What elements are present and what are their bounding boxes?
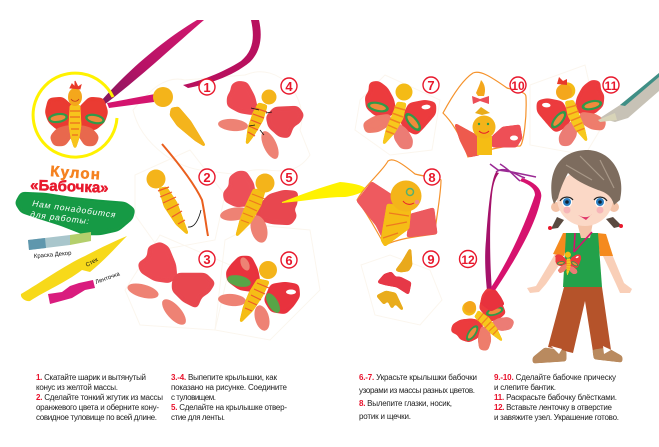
step 10: 10	[511, 79, 525, 93]
instructions column 3: узорами из массы разных цветов.	[359, 386, 475, 395]
label: ribbon: Ленточка	[95, 271, 121, 286]
instructions column 1: оранжевого цвета и оберните кону-	[36, 403, 159, 412]
sleeves	[553, 233, 570, 256]
icon: modelling knife: Стек	[85, 257, 100, 269]
instructions column 2	[171, 373, 288, 422]
icon: ribbon piece	[48, 280, 95, 304]
step 11: 11	[605, 79, 618, 93]
arms	[527, 254, 564, 293]
main pendant circle	[33, 73, 117, 157]
instructions column 4: 9.-10. Сделайте бабочке прическу	[494, 373, 616, 382]
instructions column 3: 8. Вылепите глазки, носик,	[359, 399, 452, 408]
instructions column 1	[36, 373, 163, 422]
yellow modelling knife across pages	[282, 182, 367, 203]
girl figure	[527, 150, 632, 362]
step 2: 2	[203, 170, 211, 185]
label: paint: Краска Декор	[34, 251, 72, 260]
step 3	[126, 244, 215, 329]
step 10	[443, 72, 526, 157]
neck	[577, 222, 593, 238]
instructions column 2: показано на рисунке. Соедините	[171, 383, 288, 392]
instructions column 4: и слепите бантик.	[494, 383, 556, 392]
step 7: 7	[427, 78, 435, 93]
pigtails	[551, 217, 564, 229]
title: «Бабочка»	[30, 177, 109, 197]
step 4	[218, 78, 302, 161]
icon: paint tube	[28, 232, 91, 250]
green banner: Нам понадобится	[32, 198, 117, 220]
instructions column 2: с туловищем.	[171, 393, 216, 402]
instructions column 1: 1. Скатайте шарик и вытянутый	[36, 373, 146, 382]
instructions column 4: и завяжите узел. Украшение готово.	[494, 413, 619, 422]
step 11	[539, 73, 659, 144]
step 5: 5	[285, 170, 293, 185]
step 6	[218, 252, 298, 332]
green banner: для работы:	[30, 209, 90, 226]
step 5	[219, 169, 297, 245]
title	[30, 163, 109, 197]
step 4: 4	[285, 79, 293, 94]
ribbon from pendant	[96, 20, 261, 108]
instructions column 3	[359, 373, 477, 421]
step 8: 8	[428, 170, 436, 185]
step 2	[146, 144, 215, 236]
icon: modelling knife	[21, 236, 127, 301]
instructions column 4: 11. Раскрасьте бабочку блёстками.	[494, 393, 617, 402]
step 7	[365, 77, 439, 147]
instructions column 2: 3.-4. Выпепите крылышки, как	[171, 373, 278, 382]
step 12: finished necklace	[450, 164, 541, 356]
main butterfly	[47, 81, 106, 147]
step 8	[357, 160, 441, 245]
step 9: 9	[427, 252, 435, 267]
instructions column 3: 6.-7. Украсьте крылышки бабочки	[359, 373, 477, 382]
step 12: finished necklace: 12	[461, 253, 475, 267]
instructions column 2: 5. Сделайте на крылышке отвер-	[171, 403, 287, 412]
icon: glitter tube	[598, 73, 659, 122]
shirt	[563, 233, 602, 287]
step 9	[378, 250, 439, 309]
instructions column 4: 12. Вставьте ленточку в отверстие	[494, 403, 613, 412]
face	[557, 170, 613, 226]
green banner	[17, 194, 133, 233]
instructions column 1: 2. Сделайте тонкий жгутик из массы	[36, 393, 163, 402]
instructions column 1: совидное туловище по всей длине.	[36, 413, 157, 422]
ears	[551, 202, 561, 212]
necklace on girl	[574, 232, 592, 252]
mouth	[578, 214, 592, 220]
step 1: 1	[203, 80, 211, 95]
step 3: 3	[203, 252, 211, 267]
title: Кулон	[50, 163, 102, 184]
step 1	[153, 79, 215, 145]
hair	[551, 150, 621, 205]
faint step outlines	[125, 65, 600, 340]
instructions column 3: ротик и щечки.	[359, 412, 411, 421]
instructions column 1: конус из желтой массы.	[36, 383, 118, 392]
step 6: 6	[285, 253, 293, 268]
shoes	[534, 349, 565, 362]
instructions column 4	[494, 373, 619, 422]
trousers	[548, 287, 611, 353]
instructions column 2: стие для ленты.	[171, 413, 225, 422]
cheeks	[564, 206, 570, 214]
eyes	[562, 196, 572, 208]
